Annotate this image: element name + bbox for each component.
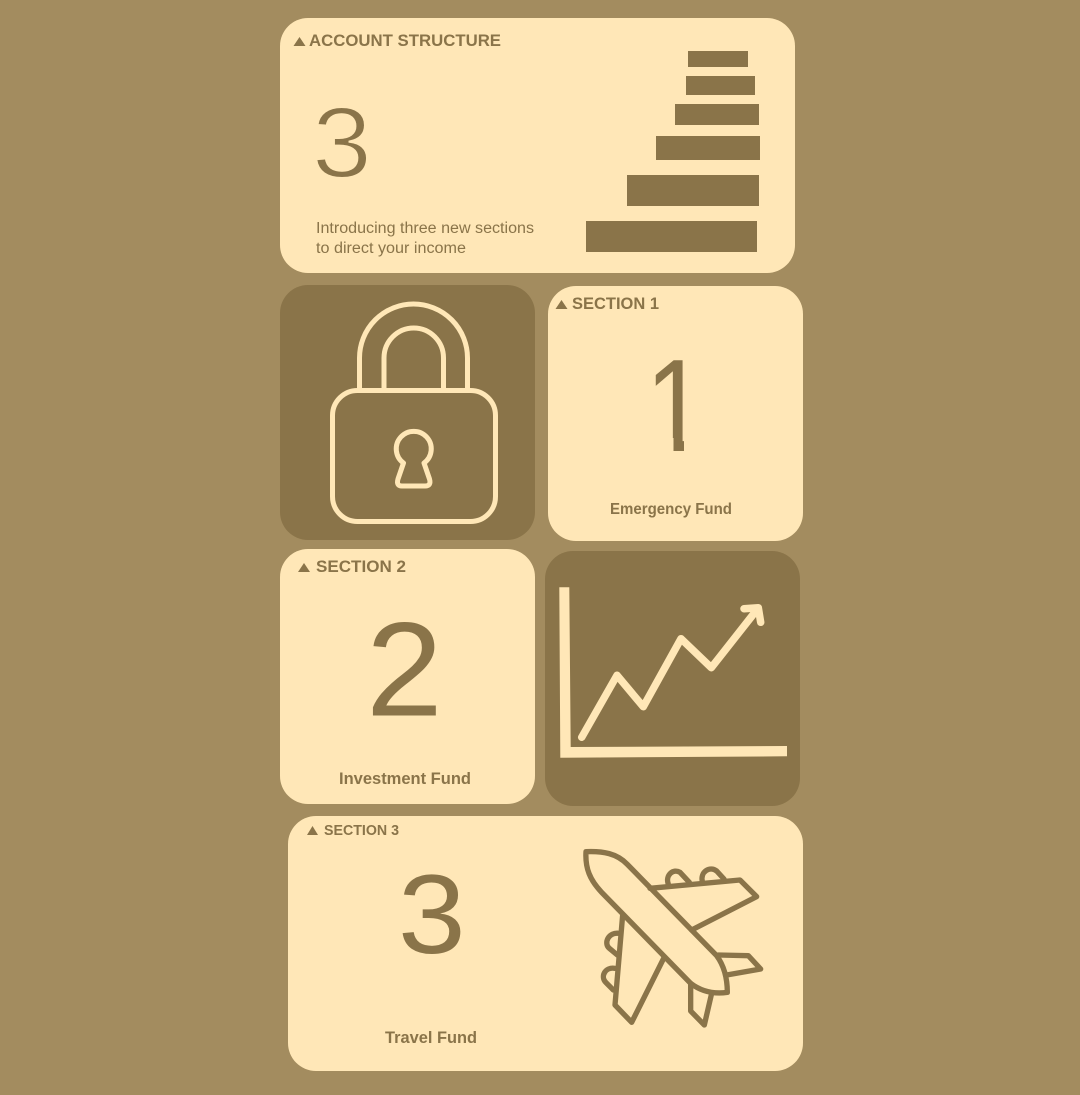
panel: account structure [280,18,795,273]
icon: chart axes [559,587,787,758]
panel: section 1 [548,286,803,541]
panel: growth chart [545,551,800,806]
description text: to direct your income [316,240,466,257]
heading: account structure: ACCOUNT STRUCTURE [309,31,501,50]
icon: airplane [586,852,761,1025]
label: travel fund: Travel Fund [385,1028,477,1047]
heading: section 1: SECTION 1 [572,294,659,313]
big number 1: 1 [645,331,706,479]
heading: section 2: SECTION 2 [316,557,406,576]
label: emergency fund: Emergency Fund [610,501,732,518]
icon: padlock [332,304,496,522]
icon: rising arrow line [582,608,761,737]
panel: section 3 [288,816,803,1071]
stacked bars pyramid [586,51,760,252]
panel: section 2 [280,549,535,804]
panel: padlock [280,285,535,540]
big number 3: 3 [312,87,372,199]
big number 2: 2 [366,594,443,744]
heading: section 3: SECTION 3 [324,823,399,839]
description text: Introducing three new sections [316,220,534,237]
description text [316,220,534,257]
label: investment fund: Investment Fund [339,769,471,788]
big number 3: 3 [398,851,466,977]
